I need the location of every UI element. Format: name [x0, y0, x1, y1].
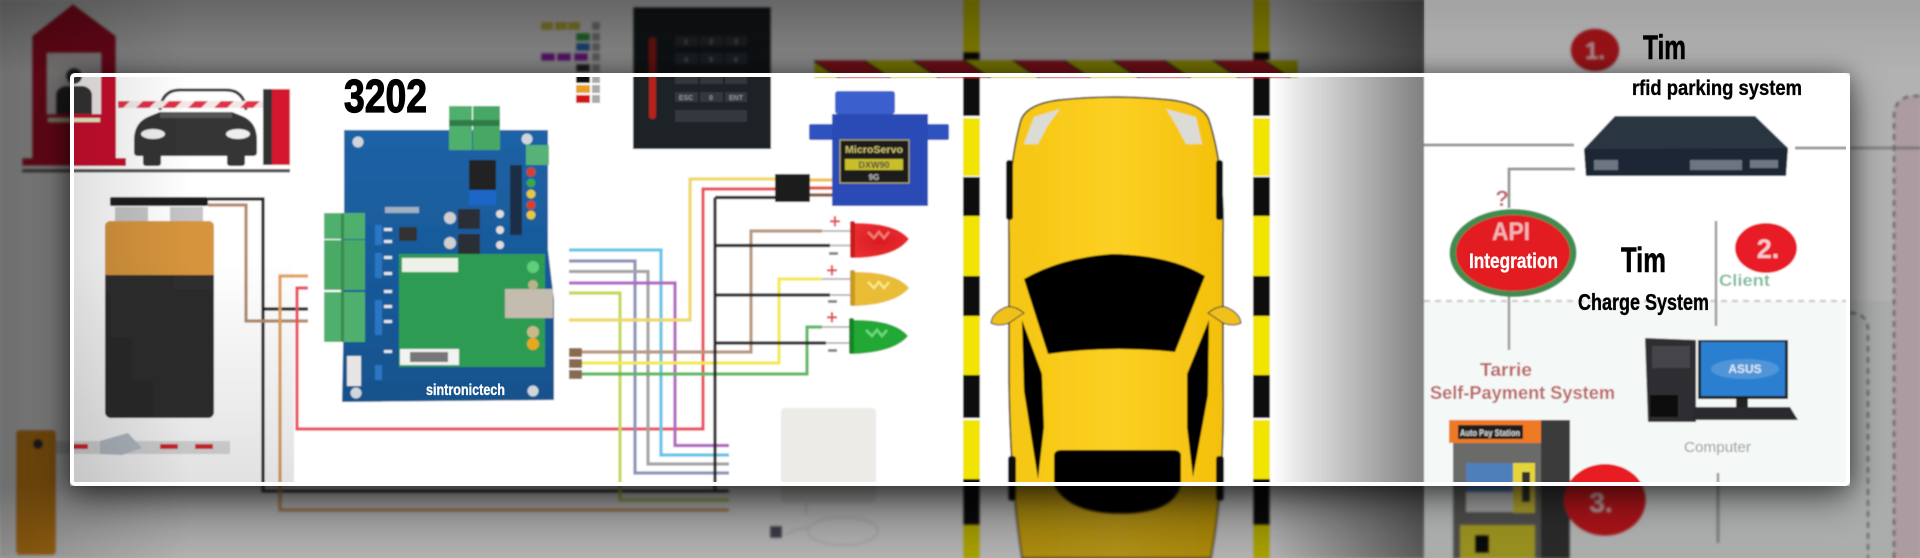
road lane stripes right	[1253, 0, 1270, 558]
icon: lower-left boom barrier	[16, 430, 230, 555]
label: Integration: Integration	[1469, 250, 1558, 273]
icon: micro servo: DXW90	[858, 160, 890, 170]
icon: step badge 1	[1570, 28, 1620, 72]
icon: micro servo: 9G	[869, 173, 879, 182]
icon: RFID keypad reader: 2	[709, 39, 713, 46]
panel: blue controller board	[324, 106, 554, 402]
icon: amber LED	[826, 260, 909, 306]
icon: barrier arm and post	[22, 89, 290, 172]
icon: question mark: ?	[1495, 186, 1509, 211]
icon: amber LED: +	[826, 260, 838, 282]
icon: green LED	[826, 307, 908, 354]
label: client: Client	[1719, 271, 1770, 290]
icon: red LED: +	[829, 211, 841, 233]
icon: step badge 3	[1564, 464, 1646, 536]
icon: yellow car top view	[991, 97, 1241, 558]
label: sintronictech: sintronictech	[426, 382, 505, 399]
icon: RFID keypad reader: 1	[684, 39, 688, 46]
shading: lower left patch	[70, 256, 294, 486]
icon: guard booth	[22, 4, 126, 166]
icon: RFID keypad reader: ESC	[679, 95, 693, 102]
highlight frame	[70, 73, 1850, 486]
icon: network router	[1584, 116, 1788, 176]
label: self-payment system: Self-Payment System	[1430, 383, 1615, 403]
label: tarrie: Tarrie	[1480, 360, 1532, 380]
icon: striped gate barrier	[814, 60, 1298, 78]
panel: right network system diagram	[1424, 0, 1920, 558]
icon: UHF antenna	[770, 408, 878, 545]
road lane stripes	[963, 0, 980, 558]
icon: green LED: +	[826, 307, 838, 329]
icon: self-payment kiosk	[1449, 420, 1570, 558]
wiring: controller outputs	[569, 179, 850, 500]
icon: battery	[105, 197, 214, 418]
icon: RFID keypad reader: 6	[734, 57, 738, 64]
shading: gradient edge left of right panel	[1272, 0, 1424, 558]
icon: API ellipse	[1450, 209, 1576, 297]
icon: RFID keypad reader	[633, 7, 771, 149]
icon: colored pin labels	[541, 22, 600, 103]
icon: RFID keypad reader: 0	[709, 95, 713, 102]
icon: step badge 1: 1.	[1585, 38, 1605, 65]
icon: RFID keypad reader: 5	[709, 57, 713, 64]
wiring: left side	[208, 189, 775, 510]
shading: left vignette	[0, 0, 190, 558]
subheading: Charge System: Charge System	[1578, 289, 1709, 315]
icon: wire terminal connectors	[569, 348, 582, 379]
icon: RFID keypad reader: 4	[684, 57, 688, 64]
icon: step badge 2: 2.	[1757, 234, 1779, 264]
heading: Tim top: Tim	[1643, 29, 1686, 67]
icon: self-payment kiosk: Auto Pay Station	[1460, 428, 1520, 438]
icon: RFID keypad reader: 3	[734, 39, 738, 46]
subheading: rfid parking system: rfid parking system	[1632, 77, 1802, 100]
label: computer: Computer	[1684, 439, 1751, 456]
icon: micro servo	[775, 91, 949, 206]
icon: car front	[134, 90, 257, 166]
icon: micro servo: MicroServo	[845, 145, 903, 156]
icon: RFID keypad reader: ENT	[729, 95, 744, 102]
icon: desktop computer	[1645, 338, 1798, 422]
heading: Tim middle: Tim	[1621, 241, 1666, 280]
icon: step badge 2	[1735, 223, 1797, 273]
heading: 3202: 3202	[344, 70, 427, 122]
icon: API ellipse: API	[1492, 218, 1530, 246]
icon: desktop computer: ASUS	[1728, 362, 1762, 376]
icon: step badge 3: 3.	[1589, 487, 1613, 518]
icon: red LED	[829, 211, 909, 258]
